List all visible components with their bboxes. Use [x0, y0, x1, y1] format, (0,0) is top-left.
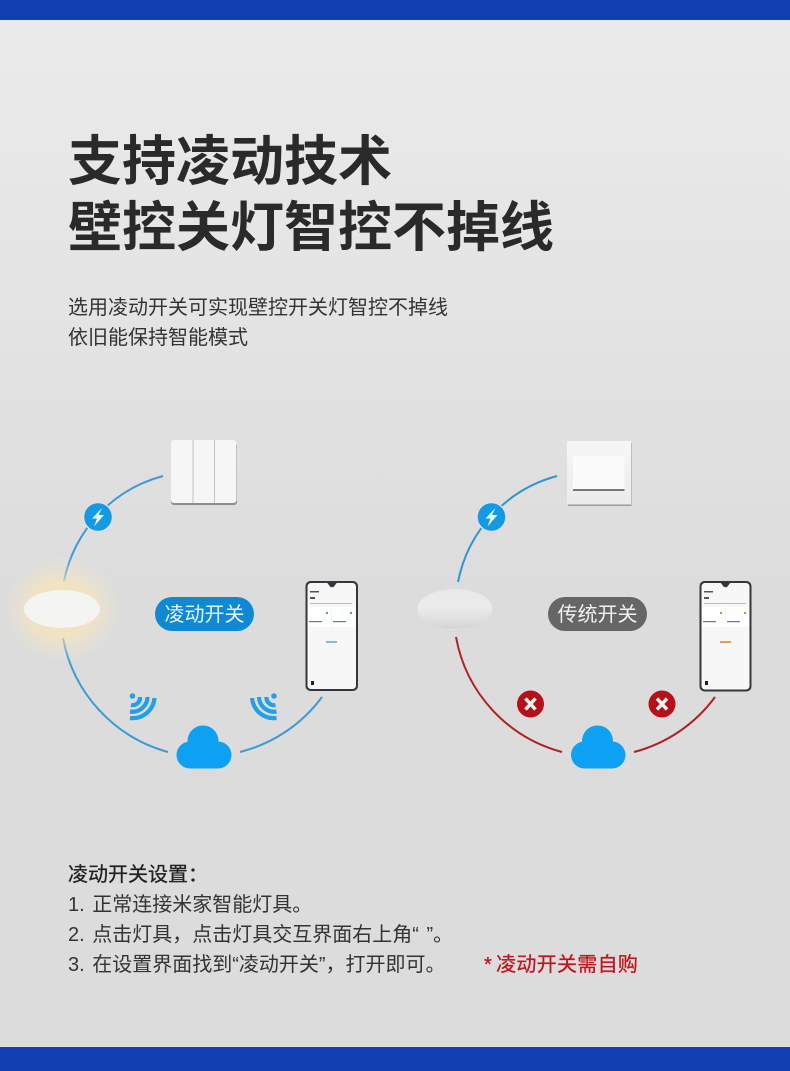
icon: wifi signal right — [252, 693, 277, 718]
icon: triple wall switch — [171, 440, 237, 505]
subtitle text: 选用凌动开关可实现壁控开关灯智控不掉线 — [68, 297, 448, 319]
power line — [458, 476, 557, 582]
step 1: 1. 正常连接米家智能灯具。 — [68, 894, 312, 916]
label pill: 凌动开关: 凌动开关 — [164, 603, 244, 626]
icon: glowing ceiling lamp — [2, 555, 122, 663]
purchase note: *凌动开关需自购 — [484, 954, 638, 976]
connection lines — [63, 476, 322, 752]
top blue bar — [0, 0, 790, 20]
instructions heading: 凌动开关设置： — [68, 864, 208, 886]
icon: unlit ceiling lamp — [418, 589, 492, 629]
icon: single rocker wall switch — [567, 441, 632, 506]
subtitle text: 依旧能保持智能模式 — [68, 327, 248, 349]
broken connection lines — [456, 637, 715, 752]
bottom blue bar — [0, 1047, 790, 1071]
icon: failure mark right — [648, 690, 676, 718]
step 2: 2. 点击灯具，点击灯具交互界面右上角“ ”。 — [68, 924, 453, 946]
icon: wifi signal left — [130, 693, 154, 718]
subtitle text — [68, 297, 448, 349]
panel: traditional switch diagram — [418, 441, 752, 768]
label pill: 传统开关 — [548, 597, 647, 631]
icon: power bolt — [477, 502, 506, 532]
label pill: 传统开关: 传统开关 — [558, 603, 638, 626]
title: 支持凌动技术 — [68, 132, 392, 192]
label pill: 凌动开关 — [155, 597, 254, 631]
icon: power bolt — [84, 502, 112, 532]
setup instructions — [68, 864, 638, 976]
title: 壁控关灯智控不掉线 — [68, 198, 554, 258]
icon: phone — [306, 581, 358, 691]
icon: cloud — [176, 726, 232, 768]
step 3: 3. 在设置界面找到“凌动开关”，打开即可。 — [68, 954, 446, 976]
icon: failure mark left — [517, 690, 544, 718]
icon: phone — [700, 581, 752, 692]
panel: dimmer switch diagram — [16, 440, 358, 768]
icon: cloud — [571, 726, 626, 768]
title — [68, 132, 554, 258]
